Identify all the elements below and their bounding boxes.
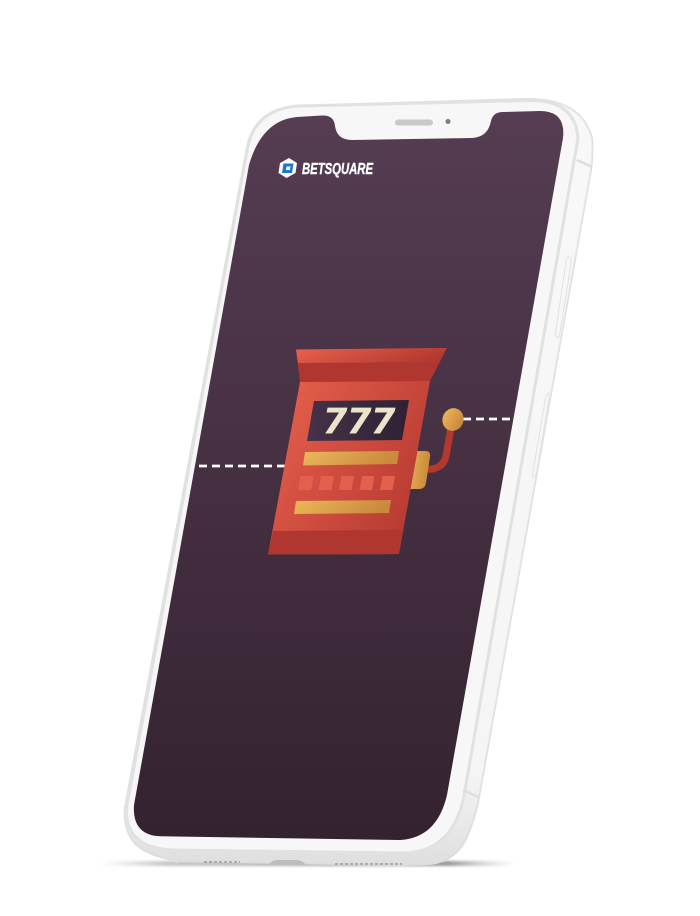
illustration: phone with slot machine bbox=[112, 98, 594, 868]
lever base bbox=[405, 451, 430, 489]
lever arm bbox=[425, 428, 451, 470]
gold bar lower bbox=[294, 500, 391, 514]
icon: hexagon logo mark bbox=[278, 158, 297, 178]
display window bbox=[307, 400, 409, 441]
phone body bbox=[124, 98, 593, 866]
dashed line left bbox=[199, 465, 286, 467]
gold bar upper bbox=[303, 451, 399, 466]
machine header bbox=[296, 348, 447, 382]
brand name: BETSQUARE bbox=[302, 161, 374, 178]
buttons row bbox=[298, 476, 395, 490]
slot machine bbox=[268, 348, 467, 554]
body edge shading bbox=[124, 98, 593, 866]
reels: 777: 777 bbox=[322, 402, 396, 442]
front camera bbox=[446, 119, 450, 124]
side buttons bbox=[532, 257, 571, 477]
front plate bbox=[126, 100, 578, 853]
antenna seams bbox=[172, 160, 592, 863]
bottom grille and port bbox=[204, 860, 402, 865]
screen bbox=[134, 111, 563, 840]
ground shadow bbox=[100, 861, 515, 866]
earpiece speaker bbox=[395, 120, 433, 126]
logo: Betsquare bbox=[278, 158, 374, 178]
lever knob bbox=[439, 405, 467, 434]
dashed line right bbox=[463, 418, 512, 420]
machine body bbox=[268, 381, 430, 554]
